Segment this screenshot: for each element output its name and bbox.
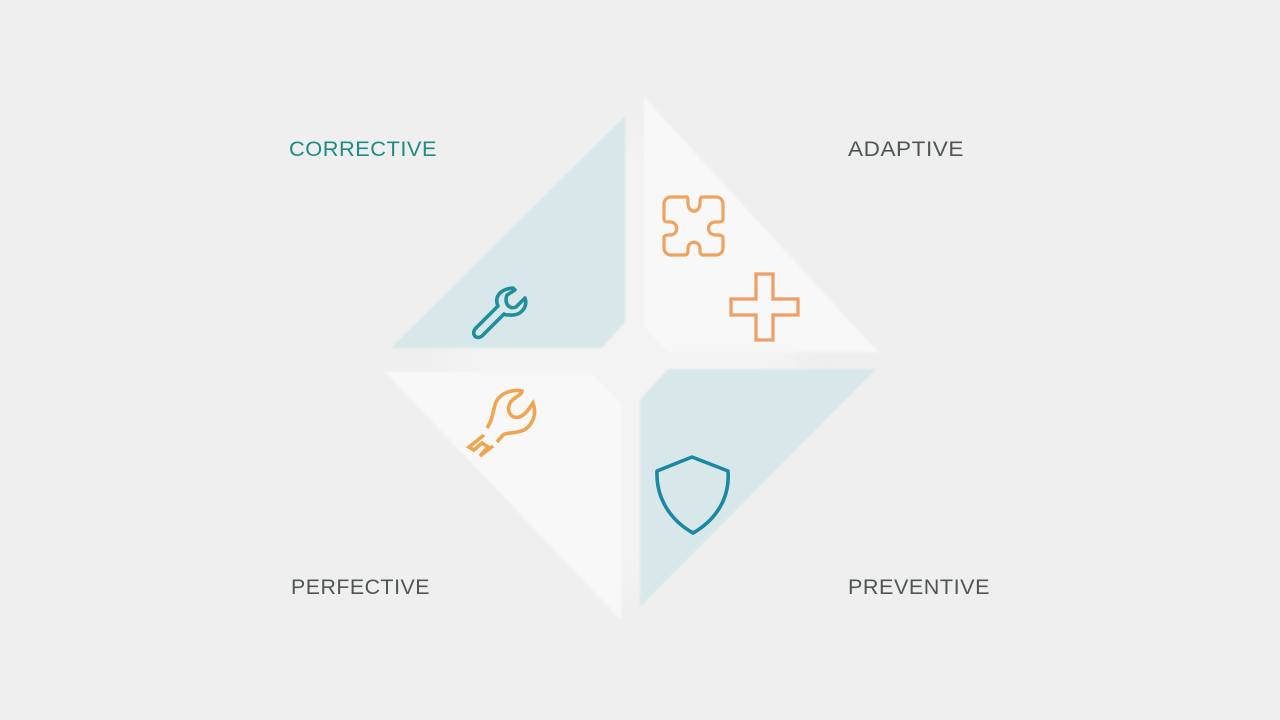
label: preventive: PREVENTIVE	[848, 576, 990, 599]
panel: adaptive quadrant	[644, 97, 878, 352]
icon: orange puzzle piece	[664, 197, 723, 255]
panel: perfective quadrant	[385, 372, 621, 620]
panel: corrective quadrant	[391, 116, 625, 348]
icon: orange broken wrench	[469, 390, 535, 456]
panel: preventive quadrant	[640, 369, 876, 607]
icon: orange plus	[731, 274, 798, 340]
label: adaptive: ADAPTIVE	[848, 138, 964, 161]
icon: teal wrench	[474, 288, 526, 337]
label: corrective: CORRECTIVE	[289, 138, 437, 161]
icon: teal shield	[657, 457, 728, 533]
label: perfective: PERFECTIVE	[291, 576, 430, 599]
